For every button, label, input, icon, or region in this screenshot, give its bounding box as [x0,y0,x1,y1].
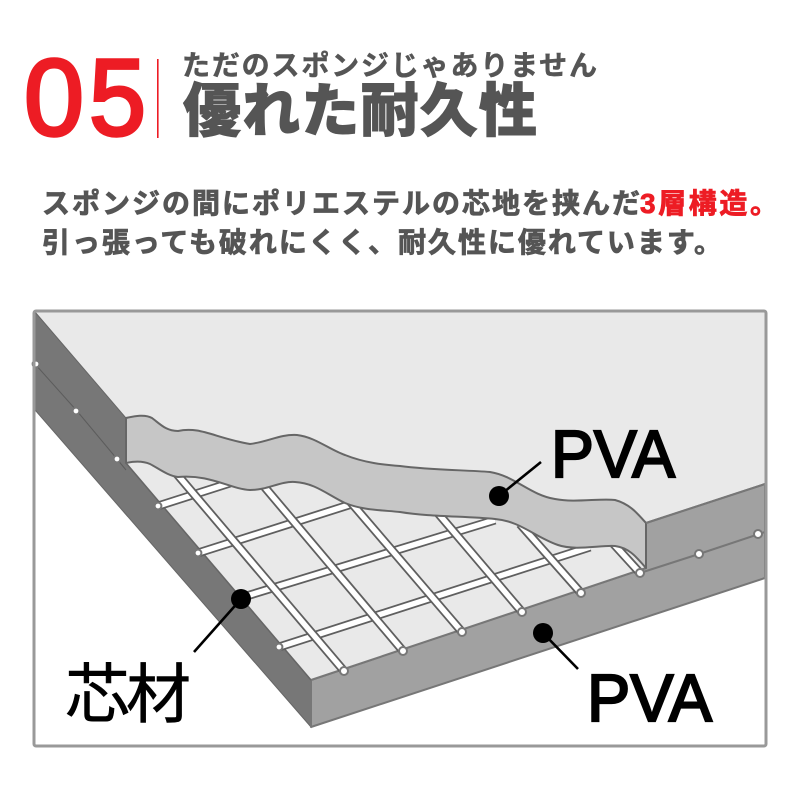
left side face [35,312,311,727]
callout: lower PVA: PVA [587,661,712,736]
mesh end dots [33,361,762,675]
top PVA surface [35,312,765,560]
section number 05: 5 [89,37,146,159]
callout: core material [65,589,251,731]
callout: core material: 芯材 [65,658,191,731]
main heading: 優れた耐久性 [183,79,537,144]
mesh cross threads [158,483,590,647]
section number 05: 0 [24,37,84,159]
exposed core material with mesh [126,440,646,680]
red divider [157,59,159,138]
mesh long threads [176,473,640,671]
torn PVA cut section [126,416,646,568]
callout: lower PVA [533,623,712,736]
callout: upper PVA: PVA [551,417,675,492]
panel border [34,311,766,746]
panel background [34,311,766,746]
front side face [311,484,765,727]
subtitle: ただのスポンジじゃありません [182,50,597,81]
description text [42,188,778,258]
highlighted text: 3層構造。 [640,188,778,219]
diagram panel [33,311,766,746]
section number 05 [24,37,146,159]
callout: upper PVA [489,417,675,506]
description text: 引っ張っても破れにくく、耐久性に優れています。 [42,227,722,258]
description text: スポンジの間にポリエステルの芯地を挟んだ [42,188,640,219]
